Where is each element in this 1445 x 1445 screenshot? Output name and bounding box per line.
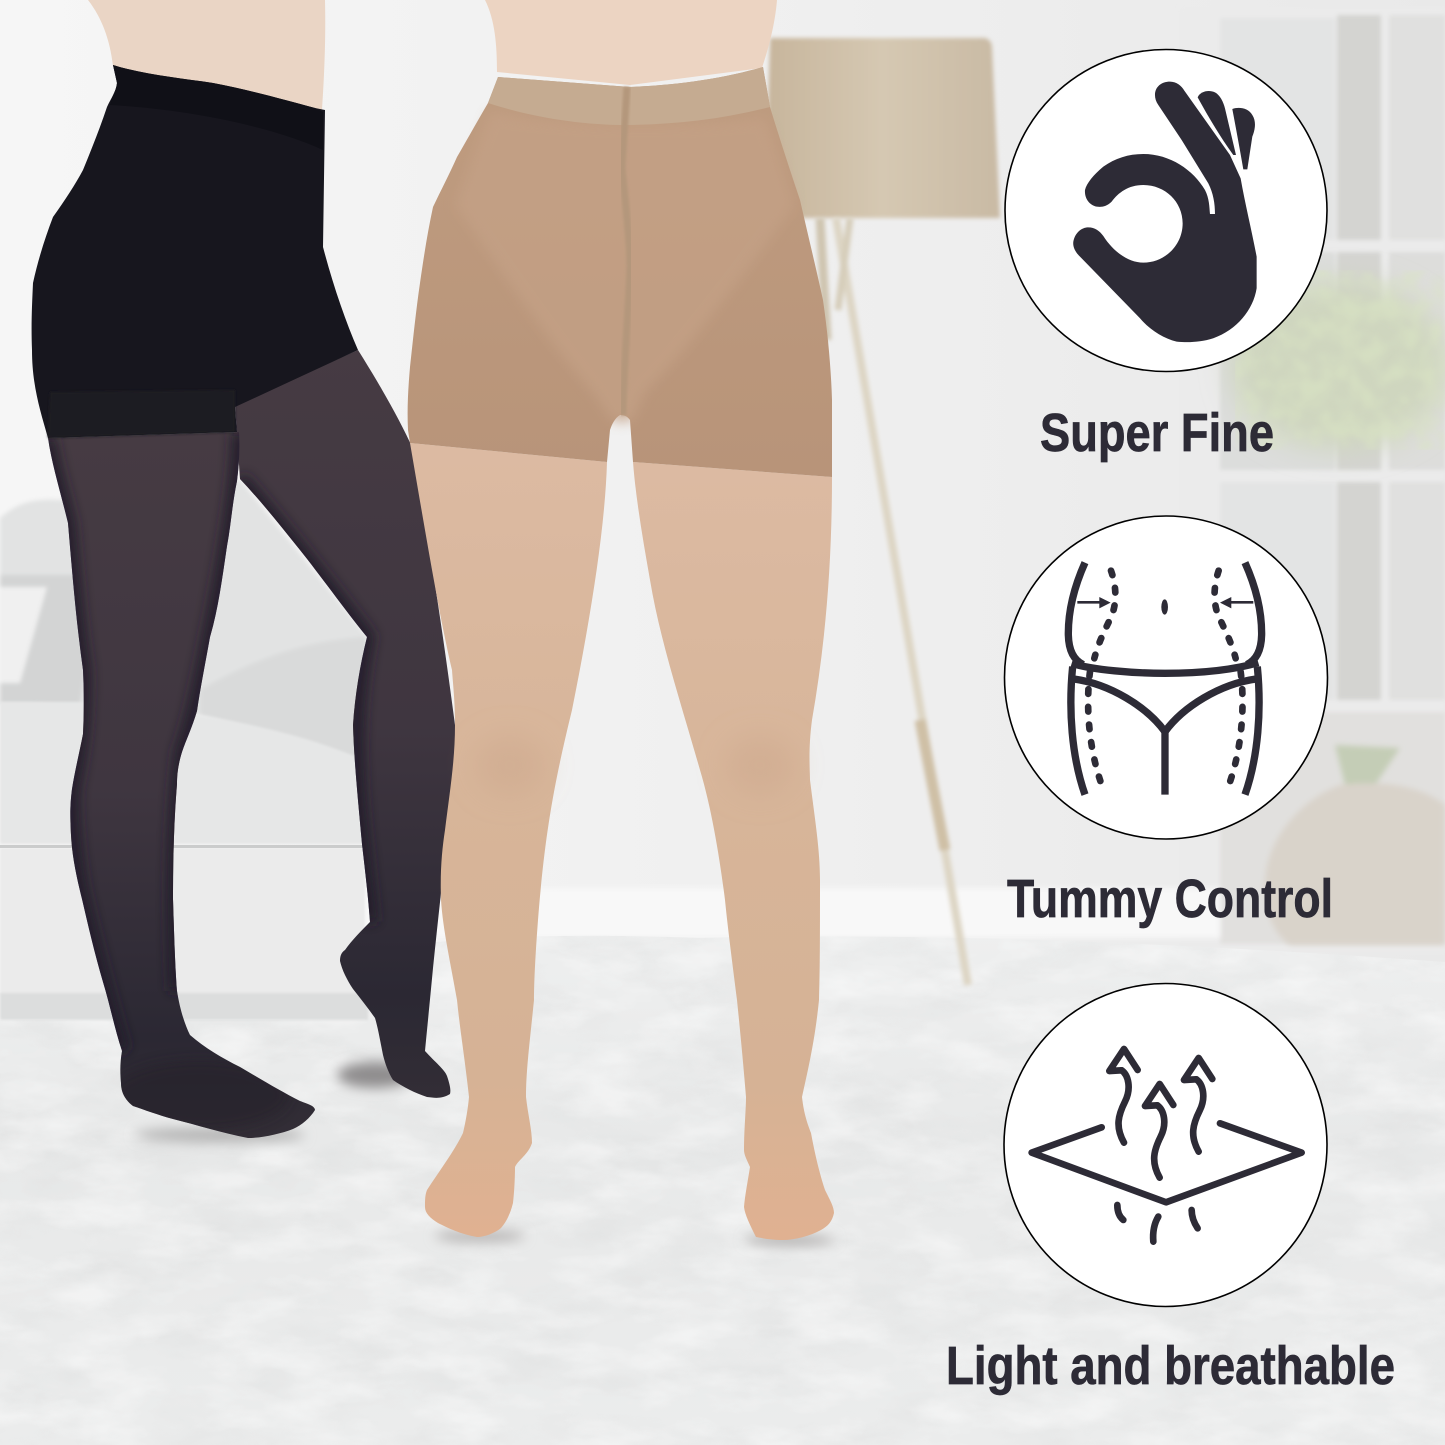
panel: tummy control [1004,516,1333,929]
sofa [0,480,368,1020]
panel: light and breathable [946,984,1395,1396]
briefs cuff [48,390,235,438]
lighter front panel [455,112,795,422]
centre seam [622,87,630,415]
dark briefs [32,65,358,438]
waistband [488,67,770,125]
figure: nude tights [408,0,834,1240]
knee shading [475,735,795,795]
floor lamp [765,38,1000,985]
bare torso [485,0,777,85]
front leg [40,430,330,1145]
plant [1230,270,1445,450]
rug [0,930,1445,1445]
right leg [633,462,834,1240]
control brief [408,67,832,477]
panel: super fine [1005,50,1327,463]
label: Super Fine [1040,403,1274,463]
circle badge [1004,984,1327,1306]
left leg [410,443,607,1237]
icon: breathable fabric [1032,1049,1302,1242]
baseboard [360,888,1220,938]
bare torso [88,0,325,110]
briefs waistband [110,65,323,150]
circle badge [1004,516,1328,839]
circle badge [1005,50,1327,372]
icon: ok hand [1073,82,1257,342]
label: Tummy Control [1007,869,1333,929]
shadows on rug under feet [135,1062,835,1246]
shelf unit [1180,8,1445,953]
back leg [235,350,455,1098]
vase [1265,745,1445,945]
figure: black tights [32,0,470,1145]
icon: waist slimming [1068,563,1262,795]
